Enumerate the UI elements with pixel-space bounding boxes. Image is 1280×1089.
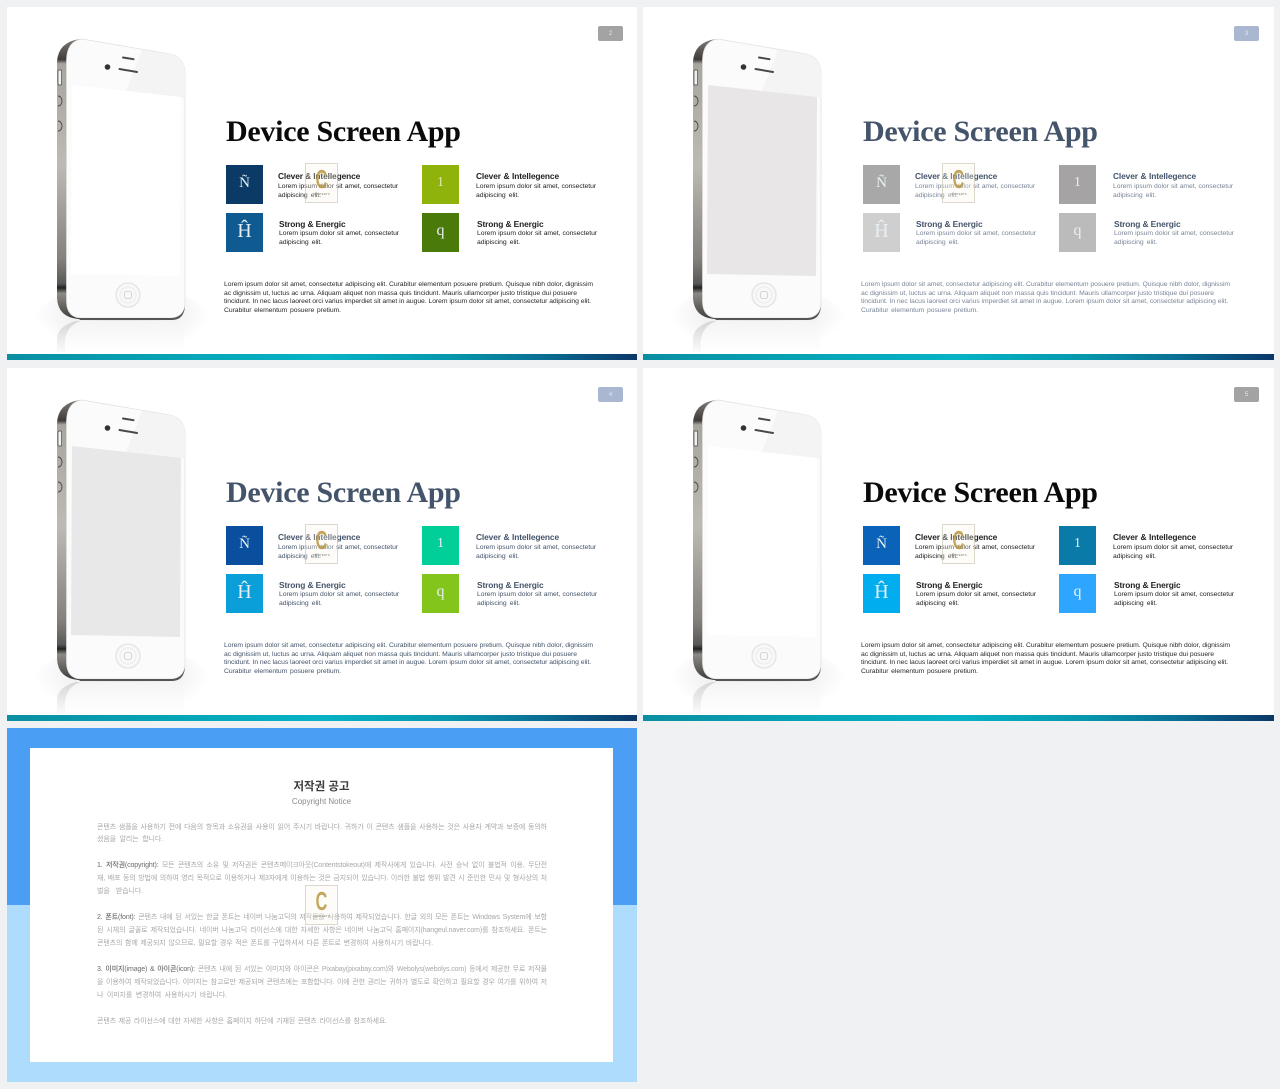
watermark: [305, 524, 338, 564]
icon: 1 tile: 1: [437, 175, 444, 190]
feature: clever and intellegence right: adipiscing elit.: [476, 553, 519, 560]
feature: clever and intellegence right: Clever & Intellegence: [1113, 532, 1196, 542]
paragraph: tincidunt. In nec lacus laoreet orci varius imperdiet sit amet in augue. Lorem ipsum dolor sit amet, consectetur adipiscing elit.: [861, 298, 1228, 305]
feature: clever and intellegence: adipiscing elit.: [278, 553, 321, 560]
feature: strong and energic right: adipiscing elit.: [477, 600, 520, 607]
icon: 1 tile: 1: [1074, 536, 1081, 551]
icon: 1 tile: [422, 165, 459, 204]
icon: n tile: [226, 165, 263, 204]
paragraph: Curabitur elementum posuere pretium.: [861, 307, 978, 314]
icon: white phone: [56, 38, 188, 348]
icon: q tile: q: [436, 583, 444, 600]
paragraph: [861, 642, 1230, 675]
feature: clever and intellegence: Clever & Intellegence: [915, 532, 997, 542]
section 3: image and icon: 3. 이미지(image) & 아이콘(icon): 콘텐츠 내에 된 서있는 이미지와 아이콘은 Pixabay(pixabay.com)와 Webolys(webolys.com) 등에서 제공한 무료 저작물: [97, 966, 547, 973]
title: Device Screen App: [863, 476, 1098, 509]
icon: q tile: q: [436, 222, 444, 239]
feature: clever and intellegence: Lorem ipsum dolor sit amet, consectetur: [915, 544, 1035, 551]
icon: 1 tile: [1059, 526, 1096, 565]
feature: clever and intellegence right: Clever & Intellegence: [476, 532, 559, 542]
watermark: C: [316, 525, 327, 555]
icon: h tile: Ĥ: [874, 581, 889, 603]
feature: clever and intellegence right: [422, 526, 596, 565]
feature: strong and energic right: Strong & Energic: [477, 219, 543, 229]
paragraph: Curabitur elementum posuere pretium.: [224, 668, 341, 675]
feature: strong and energic: [863, 574, 1036, 613]
feature: clever and intellegence: Lorem ipsum dolor sit amet, consectetur: [278, 544, 398, 551]
watermark: C: [953, 525, 964, 555]
section 3: image and icon: 나 이미지를 변경하여 사용하시기 바랍니다.: [97, 992, 227, 999]
feature: strong and energic right: Lorem ipsum dolor sit amet, consectetur: [1114, 230, 1234, 237]
watermark: CONTENTS: [313, 192, 330, 196]
feature: clever and intellegence right: adipiscing elit.: [1113, 553, 1156, 560]
feature: strong and energic: adipiscing elit.: [279, 600, 322, 607]
watermark: CONTENTS: [950, 192, 967, 196]
feature: strong and energic right: [422, 574, 597, 613]
watermark: [305, 163, 338, 203]
icon: q tile: [1059, 574, 1096, 613]
feature: clever and intellegence right: Lorem ipsum dolor sit amet, consectetur: [1113, 544, 1233, 551]
page number: 2: [609, 31, 612, 37]
page number: 4: [609, 392, 612, 398]
paragraph: Curabitur elementum posuere pretium.: [224, 307, 341, 314]
watermark: [942, 524, 975, 564]
watermark: C: [316, 164, 327, 194]
icon: q tile: [422, 213, 459, 252]
page number: 3: [1245, 31, 1248, 37]
feature: strong and energic: [863, 213, 1036, 252]
feature: clever and intellegence: [226, 526, 398, 565]
feature: strong and energic right: adipiscing elit.: [1114, 600, 1157, 607]
icon: h tile: [863, 213, 900, 252]
icon: q tile: [422, 574, 459, 613]
icon: n tile: Ñ: [239, 175, 250, 191]
content block: [861, 115, 1234, 314]
icon: grey screen phone: [56, 400, 188, 710]
panel: copyright notice slide: [7, 728, 637, 1082]
content block: [224, 476, 597, 675]
feature: strong and energic right: Strong & Energic: [1114, 219, 1180, 229]
intro text: 콘텐츠 샘플을 사용하기 전에 다음의 항목과 소유권을 사용이 읽어 주시기 바랍니다. 귀하가 이 콘텐츠 샘플을 사용하는 것은 사용자 계약과 보증에 동의하: [97, 824, 547, 831]
white notice card: [30, 748, 613, 1062]
feature: clever and intellegence: Lorem ipsum dolor sit amet, consectetur: [915, 183, 1035, 190]
section 1: copyright: 1. 저작권(copyright): 모든 콘텐츠의 소유 및 저작권은 콘텐츠메이크아웃(Contentstokeout)에 제작사에게 있습니다. 사전 승낙 없이 불법적 이용, 무단전: [97, 862, 547, 869]
paragraph: [224, 281, 593, 314]
title: Device Screen App: [226, 476, 461, 509]
paragraph: tincidunt. In nec lacus laoreet orci varius imperdiet sit amet in augue. Lorem ipsum dolor sit amet, consectetur adipiscing elit.: [861, 659, 1228, 666]
paragraph: tincidunt. In nec lacus laoreet orci varius imperdiet sit amet in augue. Lorem ipsum dolor sit amet, consectetur adipiscing elit.: [224, 298, 591, 305]
feature: strong and energic right: Lorem ipsum dolor sit amet, consectetur: [1114, 591, 1234, 598]
icon: h tile: [226, 213, 263, 252]
feature: clever and intellegence right: [1059, 526, 1233, 565]
bottom gradient bar: [7, 354, 637, 360]
feature: strong and energic right: [1059, 574, 1234, 613]
paragraph: Lorem ipsum dolor sit amet, consectetur adipiscing elit. Curabitur elementum posuere pretium. Quisque nibh dolor, dignissim: [224, 642, 593, 649]
content block: [224, 115, 597, 314]
paragraph: Curabitur elementum posuere pretium.: [861, 668, 978, 675]
feature: clever and intellegence right: Clever & Intellegence: [476, 171, 559, 181]
icon: h tile: Ĥ: [874, 220, 889, 242]
feature: clever and intellegence: [226, 165, 398, 204]
page number: [598, 26, 623, 41]
section 2: font: 된 시체의 글꼴로 제작되었습니다. 네이버 나눔고딕 라이선스에 대한 자세한 사항은 네이버 나눔고딕 홈페이지(hangeul.naver.com)를 참조하세요. 폰트는: [97, 927, 547, 934]
feature: strong and energic: adipiscing elit.: [916, 600, 959, 607]
icon: q tile: [1059, 213, 1096, 252]
notice heading: 저작권 공고: [293, 781, 350, 793]
feature: clever and intellegence: Clever & Intellegence: [278, 532, 360, 542]
paragraph: Lorem ipsum dolor sit amet, consectetur adipiscing elit. Curabitur elementum posuere pretium. Quisque nibh dolor, dignissim: [861, 281, 1230, 288]
title: Device Screen App: [226, 115, 461, 148]
watermark: C: [953, 164, 964, 194]
content block: [861, 476, 1234, 675]
feature: strong and energic: Lorem ipsum dolor sit amet, consectetur: [916, 591, 1036, 598]
intro text: 셨음을 알리는 합니다.: [97, 836, 163, 843]
feature: clever and intellegence right: Clever & Intellegence: [1113, 171, 1196, 181]
icon: q tile: q: [1074, 222, 1082, 239]
feature: clever and intellegence: adipiscing elit.: [915, 553, 958, 560]
icon: n tile: [863, 526, 900, 565]
feature: strong and energic: adipiscing elit.: [279, 239, 322, 246]
feature: strong and energic right: Lorem ipsum dolor sit amet, consectetur: [477, 591, 597, 598]
notice subheading: Copyright Notice: [292, 797, 351, 806]
section 2: font: 2. 폰트(font): 콘텐츠 내에 된 서있는 한글 폰트는 네이버 나눔고딕의 저작물을 사용하여 제작되었습니다. 한글 외의 모든 폰트는 Windows System에 보함: [97, 914, 547, 921]
feature: clever and intellegence right: Lorem ipsum dolor sit amet, consectetur: [1113, 183, 1233, 190]
feature: clever and intellegence: adipiscing elit.: [278, 192, 321, 199]
feature: strong and energic right: [1059, 213, 1234, 252]
feature: strong and energic: Lorem ipsum dolor sit amet, consectetur: [279, 591, 399, 598]
bottom gradient bar: [643, 715, 1274, 721]
feature: clever and intellegence right: adipiscing elit.: [1113, 192, 1156, 199]
icon: n tile: [226, 526, 263, 565]
feature: strong and energic right: [422, 213, 597, 252]
watermark: C: [316, 886, 327, 916]
icon: h tile: [226, 574, 263, 613]
page number: [598, 387, 623, 402]
feature: strong and energic: Lorem ipsum dolor sit amet, consectetur: [279, 230, 399, 237]
slide 4: blue and green: [7, 368, 637, 721]
paragraph: [861, 281, 1230, 314]
feature: clever and intellegence right: adipiscing elit.: [476, 192, 519, 199]
watermark: CONTENTS: [313, 553, 330, 557]
feature: strong and energic: [226, 574, 399, 613]
icon: h tile: Ĥ: [237, 581, 252, 603]
icon: 1 tile: 1: [437, 536, 444, 551]
icon: 1 tile: [1059, 165, 1096, 204]
section 1: copyright: [97, 861, 547, 895]
icon: n tile: Ñ: [876, 536, 887, 552]
section 2: font: 콘텐츠의 함께 제공되지 않으므로, 필요할 경우 적은 폰트를 구입하셔서 다른 폰트로 변경하여 사용하시기 바랍니다.: [97, 940, 433, 947]
feature: strong and energic right: Strong & Energic: [477, 580, 543, 590]
feature: strong and energic: adipiscing elit.: [916, 239, 959, 246]
feature: strong and energic: Strong & Energic: [916, 580, 982, 590]
bottom gradient bar: [7, 715, 637, 721]
feature: clever and intellegence: [863, 526, 1035, 565]
icon: 1 tile: 1: [1074, 175, 1081, 190]
paragraph: ac dignissim ut, luctus ac urna. Aliquam aliquet non massa quis tincidunt. Mauris ullamcorper justo tristique dui posuere: [224, 651, 577, 658]
page number: 5: [1245, 392, 1248, 398]
icon: h tile: [863, 574, 900, 613]
feature: strong and energic: Strong & Energic: [916, 219, 982, 229]
icon: n tile: Ñ: [239, 536, 250, 552]
slide 2: dark blue and green: [7, 7, 637, 360]
intro text: [97, 823, 547, 843]
icon: h tile: Ĥ: [237, 220, 252, 242]
icon: q tile: q: [1074, 583, 1082, 600]
feature: strong and energic: Strong & Energic: [279, 219, 345, 229]
feature: strong and energic right: adipiscing elit.: [1114, 239, 1157, 246]
icon: n tile: Ñ: [876, 175, 887, 191]
icon: grey screen phone: [692, 38, 824, 348]
feature: clever and intellegence right: [1059, 165, 1233, 204]
page number: [1234, 26, 1259, 41]
feature: clever and intellegence: Lorem ipsum dolor sit amet, consectetur: [278, 183, 398, 190]
paragraph: ac dignissim ut, luctus ac urna. Aliquam aliquet non massa quis tincidunt. Mauris ullamcorper justo tristique dui posuere: [861, 651, 1214, 658]
icon: n tile: [863, 165, 900, 204]
watermark: [305, 885, 338, 925]
feature: strong and energic: Lorem ipsum dolor sit amet, consectetur: [916, 230, 1036, 237]
watermark: CONTENTS: [950, 553, 967, 557]
feature: strong and energic: [226, 213, 399, 252]
title: Device Screen App: [863, 115, 1098, 148]
slide 3: grey: [643, 7, 1274, 360]
feature: strong and energic: Strong & Energic: [279, 580, 345, 590]
paragraph: Lorem ipsum dolor sit amet, consectetur adipiscing elit. Curabitur elementum posuere pretium. Quisque nibh dolor, dignissim: [224, 281, 593, 288]
feature: clever and intellegence: Clever & Intellegence: [278, 171, 360, 181]
section 2: font: [97, 913, 547, 947]
page number: [1234, 387, 1259, 402]
section 3: image and icon: [97, 965, 547, 999]
section 1: copyright: 벌을 받습니다.: [97, 888, 143, 895]
feature: clever and intellegence right: Lorem ipsum dolor sit amet, consectetur: [476, 544, 596, 551]
section 3: image and icon: 을 이용하여 제작되었습니다. 이미지는 참고로만 제공되며 콘텐츠에는 포함합니다. 이에 관한 권리는 귀하가 별도로 확인하고 필요할 경우 여기를 위하여 저: [97, 979, 547, 986]
paragraph: Lorem ipsum dolor sit amet, consectetur adipiscing elit. Curabitur elementum posuere pretium. Quisque nibh dolor, dignissim: [861, 642, 1230, 649]
feature: clever and intellegence: [863, 165, 1035, 204]
feature: clever and intellegence right: [422, 165, 596, 204]
bottom gradient bar: [643, 354, 1274, 360]
feature: clever and intellegence: Clever & Intellegence: [915, 171, 997, 181]
icon: 1 tile: [422, 526, 459, 565]
feature: clever and intellegence right: Lorem ipsum dolor sit amet, consectetur: [476, 183, 596, 190]
feature: strong and energic right: Lorem ipsum dolor sit amet, consectetur: [477, 230, 597, 237]
feature: clever and intellegence: adipiscing elit.: [915, 192, 958, 199]
paragraph: ac dignissim ut, luctus ac urna. Aliquam aliquet non massa quis tincidunt. Mauris ullamcorper justo tristique dui posuere: [224, 290, 577, 297]
icon: white phone: [692, 400, 824, 710]
watermark: CONTENTS: [313, 914, 330, 918]
paragraph: [224, 642, 593, 675]
watermark: [942, 163, 975, 203]
feature: strong and energic right: adipiscing elit.: [477, 239, 520, 246]
paragraph: ac dignissim ut, luctus ac urna. Aliquam aliquet non massa quis tincidunt. Mauris ullamcorper justo tristique dui posuere: [861, 290, 1214, 297]
slide 5: bright blue: [643, 368, 1274, 721]
section 1: copyright: 재, 배포 등의 방법에 의하여 영리 목적으로 이용하거나 제3자에게 이용하는 것은 금지되어 있습니다. 이러한 불법 행위 발견 시 준인한 민사 및 형사상의 처: [97, 875, 547, 882]
closing line: 콘텐츠 제공 라이선스에 대한 자세한 사항은 홈페이지 하단에 기재된 콘텐츠 라이선스를 참조하세요.: [97, 1018, 387, 1025]
paragraph: tincidunt. In nec lacus laoreet orci varius imperdiet sit amet in augue. Lorem ipsum dolor sit amet, consectetur adipiscing elit.: [224, 659, 591, 666]
feature: strong and energic right: Strong & Energic: [1114, 580, 1180, 590]
